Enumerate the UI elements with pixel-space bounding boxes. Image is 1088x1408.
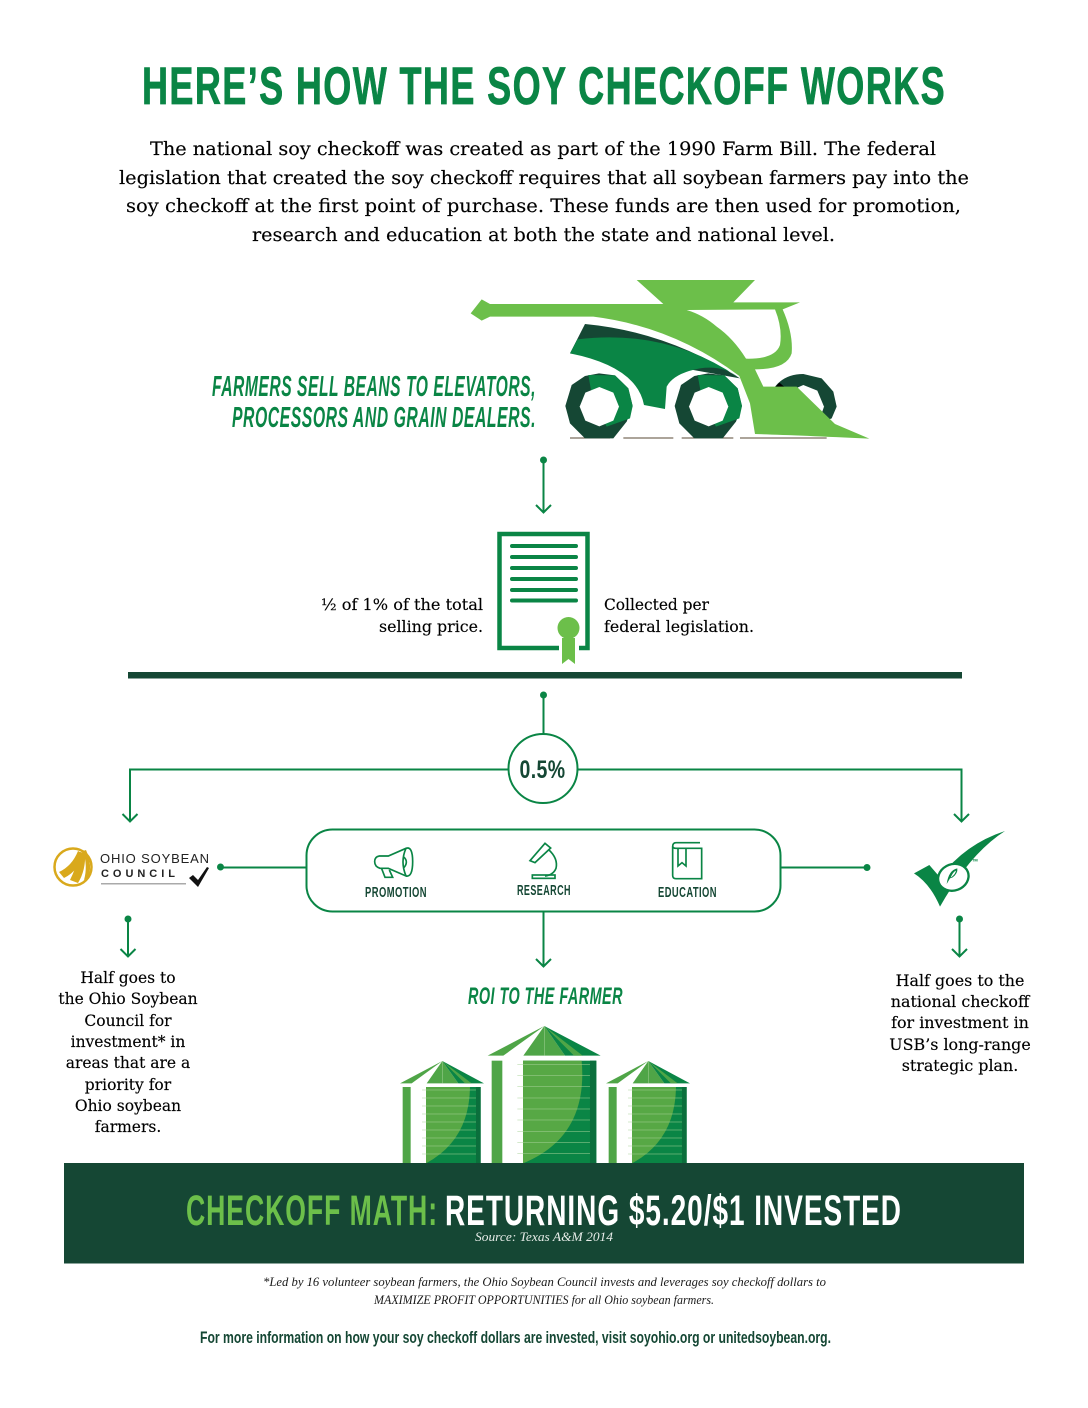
text: half of one percent: ½ of 1% of the total bbox=[321, 595, 483, 614]
logo: soy checkoff check mark bbox=[914, 831, 1005, 907]
panel: promotion, research, education bbox=[306, 830, 780, 912]
text: half goes to Ohio Soybean Council: areas that are a bbox=[66, 1054, 190, 1072]
arrow: combine to certificate bbox=[536, 456, 551, 512]
text: half goes to national checkoff: Half goes to the bbox=[896, 971, 1024, 990]
text: half goes to Ohio Soybean Council: the Ohio Soybean bbox=[58, 990, 198, 1008]
flow lines and arrows bbox=[120, 692, 969, 966]
intro paragraph: soy checkoff at the first point of purchase. These funds are then used for promotion, bbox=[126, 196, 961, 217]
text: half goes to national checkoff: USB’s long-range bbox=[889, 1035, 1031, 1054]
text: collected per legislation: Collected per bbox=[604, 595, 709, 614]
heading: farmers sell beans: PROCESSORS AND GRAIN DEALERS. bbox=[232, 402, 536, 434]
icon: megaphone bbox=[375, 848, 413, 877]
text: half goes to Ohio Soybean Council: priority for bbox=[85, 1076, 172, 1094]
badge: 0.5%: 0.5% bbox=[520, 756, 566, 784]
heading: farmers sell beans bbox=[212, 371, 536, 434]
label: research: RESEARCH bbox=[517, 883, 571, 899]
intro paragraph: research and education at both the state and national level. bbox=[252, 225, 835, 246]
text: half of one percent: selling price. bbox=[379, 617, 483, 636]
logo: Ohio Soybean Council: COUNCIL bbox=[101, 868, 175, 880]
logo: Ohio Soybean Council bbox=[54, 848, 209, 887]
silo: left bbox=[400, 1061, 484, 1164]
banner: checkoff math: CHECKOFF MATH: bbox=[186, 1187, 438, 1235]
icon: microscope bbox=[530, 843, 556, 878]
intro paragraph: legislation that created the soy checkoff requires that all soybean farmers pay into the bbox=[119, 168, 969, 189]
icon: combine harvester bbox=[471, 280, 869, 439]
heading: farmers sell beans: FARMERS SELL BEANS TO ELEVATORS, bbox=[212, 371, 536, 403]
text: half goes to Ohio Soybean Council: farmers. bbox=[95, 1118, 161, 1136]
text: half goes to Ohio Soybean Council: Council for bbox=[84, 1012, 172, 1030]
text: half goes to national checkoff: strategic plan. bbox=[902, 1056, 1018, 1075]
text: collected per legislation bbox=[604, 595, 754, 636]
intro paragraph bbox=[119, 139, 969, 246]
footnote bbox=[263, 1274, 826, 1307]
logo: Ohio Soybean Council: OHIO SOYBEAN bbox=[100, 851, 209, 866]
text: half goes to national checkoff bbox=[889, 971, 1031, 1075]
banner: checkoff math bbox=[64, 1163, 1024, 1264]
icon: certificate bbox=[500, 534, 588, 664]
text: half goes to Ohio Soybean Council bbox=[58, 969, 198, 1136]
silo: right bbox=[606, 1061, 690, 1164]
footnote: MAXIMIZE PROFIT OPPORTUNITIES for all Ohio soybean farmers. bbox=[373, 1292, 714, 1307]
label: education: EDUCATION bbox=[658, 885, 717, 901]
text: half of one percent bbox=[321, 595, 483, 636]
label: promotion: PROMOTION bbox=[365, 885, 427, 901]
badge: 0.5% bbox=[508, 734, 578, 803]
silo: center bbox=[488, 1026, 601, 1164]
footer link line: For more information on how your soy checkoff dollars are invested, visit soyohio.org or unitedsoybean.org. bbox=[200, 1329, 831, 1347]
text: half goes to national checkoff: national checkoff bbox=[891, 992, 1031, 1011]
banner: checkoff math: Source: Texas A&M 2014 bbox=[475, 1229, 614, 1244]
icon: book bbox=[673, 843, 702, 879]
footnote: *Led by 16 volunteer soybean farmers, the Ohio Soybean Council invests and leverages soy checkoff dollars to bbox=[263, 1274, 826, 1289]
text: half goes to Ohio Soybean Council: Half goes to bbox=[80, 969, 176, 987]
text: collected per legislation: federal legislation. bbox=[604, 617, 754, 636]
intro paragraph: The national soy checkoff was created as part of the 1990 Farm Bill. The federal bbox=[150, 139, 936, 160]
text: half goes to Ohio Soybean Council: Ohio soybean bbox=[75, 1097, 181, 1115]
icon: grain silos bbox=[400, 1026, 690, 1164]
text: half goes to national checkoff: for investment in bbox=[891, 1013, 1029, 1032]
logo: soy checkoff check mark: TM bbox=[972, 858, 978, 863]
text: half goes to Ohio Soybean Council: investment* in bbox=[71, 1033, 185, 1051]
heading: ROI to the farmer: ROI TO THE FARMER bbox=[468, 983, 623, 1010]
